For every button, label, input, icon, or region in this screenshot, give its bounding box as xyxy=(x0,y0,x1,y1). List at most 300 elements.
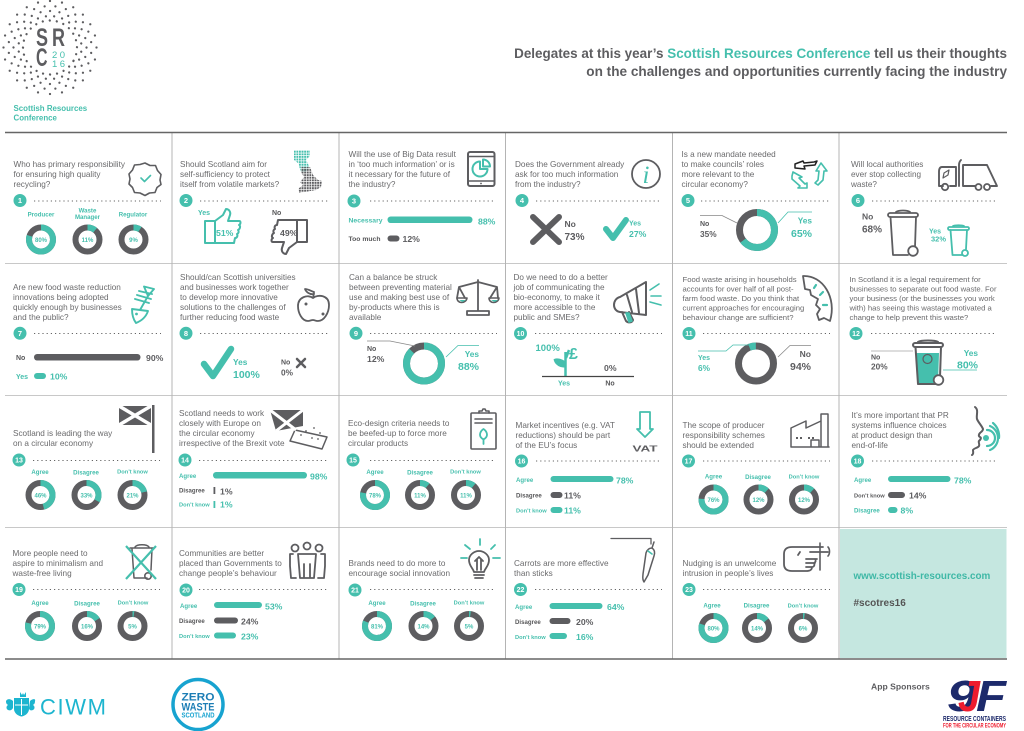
number badge: 6 xyxy=(856,196,860,205)
panel: website and hashtag: www.scottish-resources.com xyxy=(852,571,991,582)
number badge: 8 xyxy=(184,329,188,338)
number badge: 12 xyxy=(852,331,860,338)
question text: responsibility schemes xyxy=(682,431,765,440)
question text: Does the Government already xyxy=(515,160,625,169)
donut: Agree 80%: 80% xyxy=(707,626,720,632)
question text: Communities are better xyxy=(179,549,264,558)
icon: factory xyxy=(791,414,829,447)
donut: Agree 80%: Agree xyxy=(703,602,721,610)
number badge: 15 xyxy=(349,458,357,465)
bar: No 90%: No xyxy=(16,355,25,362)
donut: Disagree 16%: Disagree xyxy=(74,600,100,608)
number badge: 17 xyxy=(685,459,692,466)
donut: Agree 46%: 46% xyxy=(34,493,47,499)
question text: behaviour change are sufficient? xyxy=(682,313,793,322)
question text: Scotland needs to work xyxy=(179,409,265,418)
donut: Disagree 11%: 11% xyxy=(414,493,426,499)
bar: Too much 12%: 12% xyxy=(402,234,420,244)
bar: Don't know 23%: 23% xyxy=(241,632,259,642)
donut: Disagree 14%: Disagree xyxy=(410,600,436,608)
chart: No 68% large bin: 68% xyxy=(862,224,882,236)
donut: Yes 6% No 94% xyxy=(698,341,812,386)
question text: Are new food waste reduction xyxy=(13,283,121,292)
donut: Don't know 5%: Don’t know xyxy=(454,600,485,606)
number badge xyxy=(682,327,696,340)
panel: question 10 xyxy=(512,273,662,388)
chart: Yes 100%: 100% xyxy=(233,369,261,381)
icon: Scottish and EU flags xyxy=(270,410,327,449)
question text: farm food waste. Do you think that xyxy=(682,294,800,303)
panel: question 11 xyxy=(682,275,832,386)
bar: Agree 98%: 98% xyxy=(310,472,328,482)
bar: Disagree 1% xyxy=(179,486,233,496)
question text: ask for too much information xyxy=(515,170,619,179)
bar: Disagree 8% xyxy=(854,506,913,516)
donut: Regulator 9% xyxy=(119,212,148,252)
number badge: 18 xyxy=(854,459,861,466)
bar: Don't know 1%: Don’t know xyxy=(179,502,210,508)
bar: Disagree 1%: 1% xyxy=(220,486,233,496)
title: on the challenges and opportunities currently facing the industry xyxy=(586,64,1007,79)
chart: thumb up 51% xyxy=(198,209,240,243)
panel: question 15 xyxy=(346,409,496,507)
icon: scales xyxy=(457,280,499,315)
chart: thumb up 51%: 51% xyxy=(216,228,234,238)
bar: Agree 78%: 78% xyxy=(954,476,972,486)
donut: Yes 6% No 94%: 94% xyxy=(790,361,812,373)
number badge xyxy=(180,194,192,207)
chart: No 73%: No xyxy=(564,219,576,229)
bar: Agree 98%: Agree xyxy=(179,473,197,480)
chart: Yes 32% small bin xyxy=(929,225,969,256)
panel: question 12 xyxy=(848,275,997,385)
logo: CIWM xyxy=(6,692,106,720)
chart: No 0%: No xyxy=(281,360,290,366)
donut: Agree 78%: 78% xyxy=(369,493,382,499)
number badge xyxy=(516,194,528,207)
question text: be beefed-up to force more xyxy=(348,429,447,438)
question text: the industry? xyxy=(348,180,396,189)
bar chart: Yes 100% No 0%: £ xyxy=(569,346,578,363)
donut: Producer 80% xyxy=(28,212,55,252)
question text: the circular economy xyxy=(179,429,255,438)
chart: bin No 20% Yes 80% xyxy=(871,340,979,385)
bar: Agree 78% xyxy=(516,476,634,486)
bar: Disagree 20% xyxy=(515,617,594,627)
number badge xyxy=(682,454,695,468)
bar: Agree 53% xyxy=(180,602,283,612)
donut: No 35% Yes 65%: 65% xyxy=(791,228,813,240)
question text: aspire to minimalism and xyxy=(12,559,103,568)
donut: Disagree 14%: 14% xyxy=(751,626,764,632)
logo: Zero Waste Scotland: ZERO xyxy=(182,692,214,704)
donut: Disagree 12%: 12% xyxy=(752,498,765,504)
donut: Disagree 33%: Disagree xyxy=(73,470,99,476)
bar: No 90%: 90% xyxy=(146,353,164,363)
number badge: 4 xyxy=(520,196,525,205)
bar: Disagree 8%: Disagree xyxy=(854,508,880,514)
donut: Don't know 5%: 5% xyxy=(465,624,474,630)
question text: Should/can Scottish universities xyxy=(180,273,296,282)
icon: crossed-out bin xyxy=(126,545,156,579)
question text: your business (or the businesses you work xyxy=(850,294,995,303)
donut: No 35% Yes 65%: Yes xyxy=(798,216,812,226)
number badge xyxy=(180,584,192,596)
donut: Disagree 11% xyxy=(407,470,433,507)
number badge xyxy=(180,327,192,340)
icon: tablet pie chart xyxy=(468,152,494,186)
donut: Disagree 11%: Disagree xyxy=(407,470,433,476)
donut: Don't know 6%: Don’t know xyxy=(788,604,819,610)
bar: Disagree 24% xyxy=(179,616,259,626)
panel: question 4 xyxy=(515,160,662,243)
donut: Yes 6% No 94%: 6% xyxy=(698,363,711,373)
question text: more relevant to the xyxy=(682,170,755,179)
panel: question 20 xyxy=(179,542,327,642)
question text: in ‘too much information’ or is xyxy=(348,160,455,169)
panel: website and hashtag xyxy=(852,571,991,609)
question text: self-sufficiency to protect xyxy=(180,170,271,179)
donut: Disagree 33% xyxy=(73,470,99,507)
question text: to develop more innovative xyxy=(180,293,278,302)
icon: quality badge xyxy=(129,163,161,196)
panel: question 2 xyxy=(180,150,328,254)
question text: of the EU’s focus xyxy=(516,441,577,450)
number badge: 1 xyxy=(18,196,22,205)
donut: Waste Manager 11%: Manager xyxy=(75,214,101,221)
chart: Yes 27% xyxy=(606,220,647,239)
icon: light bulb xyxy=(461,539,500,578)
question text: In Scotland it is a legal requirement for xyxy=(850,275,981,284)
app sponsors label: App Sponsors xyxy=(871,682,930,692)
number badge: 14 xyxy=(181,458,189,465)
question text: itself from volatile markets? xyxy=(180,180,280,189)
donut: Regulator 9%: Regulator xyxy=(119,212,148,218)
question text: change people’s behaviour xyxy=(179,569,277,578)
number badge xyxy=(178,454,192,466)
donut: Don't know 21% xyxy=(117,470,148,507)
donut: Disagree 14% xyxy=(744,602,770,640)
donut: No 35% Yes 65%: 35% xyxy=(700,229,717,239)
number badge xyxy=(682,583,696,596)
number badge: 23 xyxy=(685,587,693,594)
question text: innovations being adopted xyxy=(13,293,109,302)
conference name: Conference xyxy=(14,114,58,122)
icon: pointing finger xyxy=(784,543,830,571)
donut: Don't know 21%: 21% xyxy=(126,493,139,499)
number badge: 22 xyxy=(517,587,524,594)
question text: and the public? xyxy=(13,313,69,322)
bar: Don't know 23% xyxy=(179,632,259,642)
question text: Is a new mandate needed xyxy=(682,150,776,159)
bar: Disagree 11%: Disagree xyxy=(516,492,542,500)
donut: Disagree 14%: Disagree xyxy=(744,602,770,610)
number badge: 10 xyxy=(517,331,524,338)
question text: Should Scotland aim for xyxy=(180,160,267,169)
chart: No 0% xyxy=(281,359,305,378)
question text: placed than Governments to xyxy=(179,559,282,568)
number badge xyxy=(12,454,26,466)
chart: No 73% xyxy=(533,217,585,243)
bar: Agree 64% xyxy=(515,602,625,612)
question text: on a circular economy xyxy=(13,439,94,448)
bar chart: Yes 100% No 0% xyxy=(536,343,634,388)
number badge xyxy=(348,194,360,208)
question text: available xyxy=(349,313,382,322)
logo: Zero Waste Scotland: SCOTLAND xyxy=(182,710,215,719)
donut: Agree 81%: Agree xyxy=(368,600,386,607)
donut: Don't know 5% xyxy=(454,600,485,638)
number badge xyxy=(348,584,362,596)
donut: Disagree 33%: 33% xyxy=(80,493,93,499)
bar: Necessary 88% xyxy=(348,216,496,226)
number badge xyxy=(346,454,360,466)
question text: public and SMEs? xyxy=(514,313,580,322)
question text: The scope of producer xyxy=(682,421,765,430)
question text: quickly enough by businesses xyxy=(13,303,122,312)
bar: Agree 78%: 78% xyxy=(616,476,634,486)
number badge xyxy=(515,454,528,468)
logo: CIWM: CIWM xyxy=(40,694,106,720)
logo: sponsor: F xyxy=(976,672,1007,721)
question text: than sticks xyxy=(514,569,553,578)
chart: No 73%: 73% xyxy=(564,232,585,243)
icon: carrot on a stick xyxy=(611,538,655,582)
number badge xyxy=(514,327,527,340)
panel: question 16 xyxy=(515,412,662,516)
number badge: 7 xyxy=(18,329,22,338)
question text: circular economy? xyxy=(682,180,748,189)
panel: question 19 xyxy=(12,545,160,638)
donut: Yes 6% No 94%: No xyxy=(800,349,811,359)
donut: Agree 46%: Agree xyxy=(31,469,49,476)
panel: question 22 xyxy=(514,538,662,642)
bar: Disagree 24%: 24% xyxy=(241,616,259,626)
question text: Nudging is an unwelcome xyxy=(682,559,777,568)
panel: question 21 xyxy=(348,539,500,638)
donut: Agree 79%: Agree xyxy=(31,600,49,607)
bar: Necessary 88%: 88% xyxy=(478,216,496,226)
chart: Yes 32% small bin: 32% xyxy=(931,234,946,244)
number badge xyxy=(514,583,527,596)
bar chart: Yes 100% No 0%: 0% xyxy=(604,363,617,373)
icon: clipboard with leaf xyxy=(471,409,496,449)
bar: Too much 12% xyxy=(348,234,420,244)
icon: group of people xyxy=(290,542,325,578)
bar chart: Yes 100% No 0%: 100% xyxy=(536,343,560,354)
bar: Don't know 14%: 14% xyxy=(909,490,927,500)
question text: by-products where this is xyxy=(349,303,440,312)
bar: Yes 10% xyxy=(16,372,68,382)
number badge xyxy=(851,454,864,468)
donut: Agree 79% xyxy=(28,600,52,638)
icon: UK dot map xyxy=(294,150,322,193)
donut: Don't know 11% xyxy=(450,470,481,507)
logo: Zero Waste Scotland: WASTE xyxy=(182,701,214,713)
donut: Agree 76%: 76% xyxy=(707,498,720,504)
question text: Eco-design criteria needs to xyxy=(348,419,450,428)
bar chart: Yes 100% No 0%: Yes xyxy=(558,380,570,388)
question text: Brands need to do more to xyxy=(348,559,446,568)
panel: question 17 xyxy=(682,414,830,512)
bar: Don't know 11%: Don’t know xyxy=(516,508,547,514)
bar: Disagree 11%: 11% xyxy=(564,490,581,500)
donut: Agree 81%: 81% xyxy=(371,624,384,630)
donut: Regulator 9%: 9% xyxy=(129,238,139,244)
bar: Disagree 1%: Disagree xyxy=(179,488,205,494)
question text: Who has primary responsibility xyxy=(14,160,126,169)
number badge xyxy=(350,327,362,340)
number badge: 21 xyxy=(351,588,359,595)
icon: information: i xyxy=(643,162,650,189)
donut: Waste Manager 11%: Waste xyxy=(79,208,97,214)
question text: Will local authorities xyxy=(851,160,923,169)
bar: Agree 53%: 53% xyxy=(265,602,283,612)
bar: Agree 64%: Agree xyxy=(515,604,533,611)
number badge xyxy=(14,327,26,340)
panel: question 3 xyxy=(348,150,496,244)
question text: from the industry? xyxy=(515,180,581,189)
question text: end-of-life xyxy=(852,441,888,450)
question text: closely with Europe on xyxy=(179,419,261,428)
panel: question 7 xyxy=(13,283,164,382)
donut: Agree 78%: Agree xyxy=(366,469,384,476)
number badge xyxy=(12,583,26,596)
icon: bitten fruit slice xyxy=(803,276,832,321)
bar: Don't know 23%: Don’t know xyxy=(179,634,210,640)
logo: sponsor: J xyxy=(958,672,981,721)
question text: More people need to xyxy=(12,549,88,558)
logo: Zero Waste Scotland xyxy=(173,680,223,730)
icon: recycling arrows xyxy=(792,161,827,188)
question text: circular products xyxy=(348,439,408,448)
bar: Don't know 16%: 16% xyxy=(576,632,594,642)
question text: recycling? xyxy=(14,180,51,189)
bar: No 90% xyxy=(16,353,164,363)
question text: waste-free living xyxy=(12,569,72,578)
donut: Producer 80%: Producer xyxy=(28,212,55,218)
bar: Too much 12%: Too much xyxy=(348,236,380,243)
donut: No 12% Yes 88% xyxy=(367,341,480,381)
number badge: 20 xyxy=(182,588,190,595)
question text: Carrots are more effective xyxy=(514,559,609,568)
question text: with) has seeing this wastage motivated a xyxy=(848,304,993,312)
number badge xyxy=(852,194,864,207)
number badge: 2 xyxy=(184,196,188,205)
chart: No 68% large bin xyxy=(862,210,918,256)
number badge: 5 xyxy=(686,196,690,205)
donut: Don't know 11%: 11% xyxy=(460,493,472,499)
question text: Market incentives (e.g. VAT xyxy=(516,421,615,430)
question text: accounts for over half of all post- xyxy=(682,284,794,294)
donut: Agree 81% xyxy=(365,600,389,638)
bar: Disagree 11% xyxy=(516,490,581,500)
donut: Don't know 5%: Don’t know xyxy=(118,600,149,606)
chart: bin No 20% Yes 80%: No xyxy=(871,354,880,362)
donut: Agree 80% xyxy=(702,602,726,640)
chart: bin No 20% Yes 80%: 80% xyxy=(957,360,979,372)
chart: No 68% large bin: No xyxy=(862,212,873,222)
question text: should be extended xyxy=(682,441,754,450)
bar: Agree 78%: Agree xyxy=(854,477,872,484)
conference logo: S xyxy=(36,24,48,52)
donut: No 12% Yes 88%: 88% xyxy=(458,361,480,373)
bar: Don't know 16% xyxy=(515,632,594,642)
donut: Agree 46% xyxy=(28,469,52,507)
donut: Waste Manager 11% xyxy=(75,208,101,252)
question text: at product design than xyxy=(852,431,933,440)
question text: businesses to separate out food waste. For xyxy=(850,284,997,294)
question text: bio-economy, to make it xyxy=(514,293,601,302)
question text: further reducing food waste xyxy=(180,313,280,322)
panel: question 18 xyxy=(851,407,999,516)
bar: Agree 78%: Agree xyxy=(516,477,534,484)
chart: thumb down 49%: No xyxy=(272,210,281,217)
number badge: 16 xyxy=(518,459,525,466)
bar: Yes 10%: 10% xyxy=(50,372,68,382)
chart: thumb down 49%: 49% xyxy=(280,228,298,238)
question text: Scotland is leading the way xyxy=(13,429,113,438)
bar: Disagree 24%: Disagree xyxy=(179,618,205,625)
donut: Don't know 12%: 12% xyxy=(798,498,811,504)
number badge xyxy=(850,327,862,340)
icon: face speaking xyxy=(972,407,999,455)
donut: Disagree 12% xyxy=(745,474,771,512)
number badge xyxy=(14,194,26,207)
question text: reductions) should be part xyxy=(516,431,611,440)
donut: Disagree 14% xyxy=(410,600,436,638)
donut: Don't know 5% xyxy=(118,600,149,638)
donut: Don't know 6%: 6% xyxy=(799,626,808,632)
donut: Agree 76%: Agree xyxy=(705,474,723,480)
chart: bin No 20% Yes 80%: 20% xyxy=(871,362,888,372)
bar: Don't know 16%: Don’t know xyxy=(515,635,546,641)
donut: Don't know 21%: Don’t know xyxy=(117,470,148,476)
icon: VAT down arrow xyxy=(632,412,659,454)
panel: question 8 xyxy=(180,273,329,381)
question text: waste? xyxy=(850,180,877,189)
donut: Yes 6% No 94%: Yes xyxy=(698,355,710,362)
bar: Agree 98% xyxy=(179,472,328,482)
donut: Don't know 6% xyxy=(788,604,819,640)
panel: question 9 xyxy=(349,273,499,381)
question text: to make councils’ roles xyxy=(682,160,764,169)
bar: Disagree 8%: 8% xyxy=(900,506,913,516)
question text: and businesses work together xyxy=(180,283,289,292)
question text: irrespective of the Brexit vote xyxy=(179,439,285,448)
logo: sponsor xyxy=(943,672,1007,730)
panel: question 14 xyxy=(178,409,328,510)
donut: No 12% Yes 88%: 12% xyxy=(367,354,385,364)
icon: information xyxy=(632,160,660,189)
bar: Yes 10%: Yes xyxy=(16,374,28,381)
question text: it necessary for the future of xyxy=(348,170,451,179)
conference logo xyxy=(3,1,97,94)
bar: Don't know 1% xyxy=(179,500,233,510)
panel: question 23 xyxy=(682,543,830,640)
question text: ever stop collecting xyxy=(851,170,922,179)
number badge: 11 xyxy=(685,331,693,338)
icon: apple xyxy=(298,289,329,321)
question text: It’s more important that PR xyxy=(852,411,949,420)
number badge: 13 xyxy=(15,458,23,465)
panel: question 1 xyxy=(14,160,161,252)
number badge xyxy=(682,194,694,207)
question text: current approaches for encouraging xyxy=(682,304,804,312)
title: Delegates at this year’s Scottish Resources Conference tell us their thoughts xyxy=(514,46,1007,61)
donut: Don't know 11%: Don’t know xyxy=(450,470,481,476)
bar: Don't know 14% xyxy=(854,490,927,500)
